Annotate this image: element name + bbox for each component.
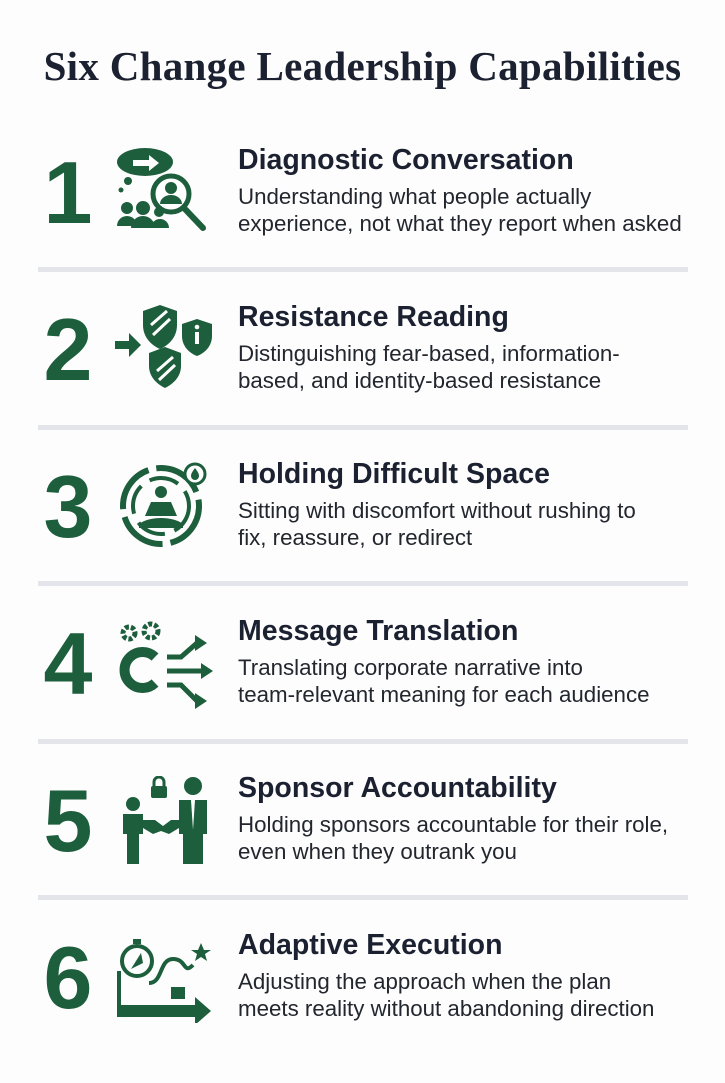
icon: diagnostic <box>117 148 206 231</box>
description: fix, reassure, or redirect <box>238 525 472 550</box>
heading: Sponsor Accountability <box>238 772 557 804</box>
number 1: 1 <box>44 143 92 242</box>
icon: translation <box>120 622 213 709</box>
icon: handshake <box>123 776 207 864</box>
row 4 <box>44 614 650 713</box>
icon: meditation <box>120 462 206 547</box>
heading: Adaptive Execution <box>238 929 502 961</box>
description <box>238 655 650 707</box>
description: Adjusting the approach when the plan <box>238 969 611 994</box>
number 4: 4 <box>44 614 92 713</box>
description: meets reality without abandoning direction <box>238 996 654 1021</box>
heading: Message Translation <box>238 615 518 647</box>
description <box>238 341 620 393</box>
description: Holding sponsors accountable for their role, <box>238 812 668 837</box>
description: even when they outrank you <box>238 839 517 864</box>
description <box>238 812 668 864</box>
description: based, and identity-based resistance <box>238 368 601 393</box>
title: Six Change Leadership Capabilities <box>44 43 681 89</box>
icon: adaptive <box>117 939 211 1023</box>
number 3: 3 <box>44 457 92 556</box>
row 6 <box>44 928 654 1027</box>
description <box>238 184 682 236</box>
description <box>238 498 636 550</box>
description: team-relevant meaning for each audience <box>238 682 650 707</box>
description: experience, not what they report when asked <box>238 211 682 236</box>
description: Translating corporate narrative into <box>238 655 583 680</box>
row 1 <box>44 143 682 242</box>
number 6: 6 <box>44 928 92 1027</box>
number 5: 5 <box>44 771 92 870</box>
description: Understanding what people actually <box>238 184 591 209</box>
description: Distinguishing fear-based, information- <box>238 341 620 366</box>
heading: Resistance Reading <box>238 301 509 333</box>
heading: Holding Difficult Space <box>238 458 550 490</box>
description <box>238 969 654 1021</box>
row 5 <box>44 771 668 870</box>
heading: Diagnostic Conversation <box>238 144 574 176</box>
row 2 <box>44 300 620 399</box>
description: Sitting with discomfort without rushing to <box>238 498 636 523</box>
number 2: 2 <box>44 300 92 399</box>
row 3 <box>44 457 636 556</box>
icon: shields <box>115 305 212 388</box>
